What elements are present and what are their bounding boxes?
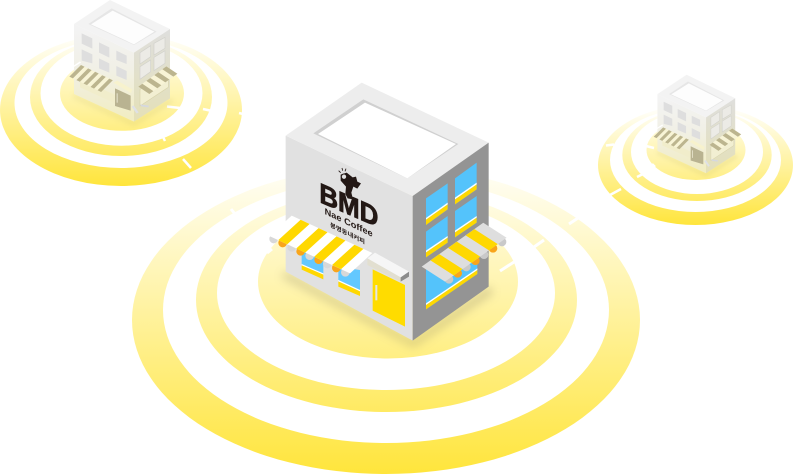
logo text: Nae Coffee: Nae Coffee — [325, 206, 373, 240]
door — [373, 269, 405, 327]
roof — [286, 83, 489, 196]
building shadow — [282, 272, 493, 347]
logo text: Korean name: 봉명동내커피 — [330, 220, 365, 246]
right wall — [413, 143, 489, 341]
rings: right signal area — [598, 105, 793, 225]
rings: left signal area — [0, 34, 243, 186]
lower left windows — [302, 250, 360, 296]
logo text: BMD: BMD — [319, 178, 378, 234]
door canopy — [367, 253, 409, 282]
left wall — [286, 136, 413, 341]
logo icon: bulb and silhouette — [339, 168, 361, 199]
left faded building — [65, 0, 177, 126]
central coffee shop building — [269, 83, 507, 347]
right awning — [422, 223, 507, 284]
upper windows — [426, 163, 477, 257]
left awning — [269, 216, 372, 277]
lower right window — [426, 237, 477, 309]
right faded building — [650, 75, 741, 177]
rings: central signal area — [132, 166, 640, 474]
